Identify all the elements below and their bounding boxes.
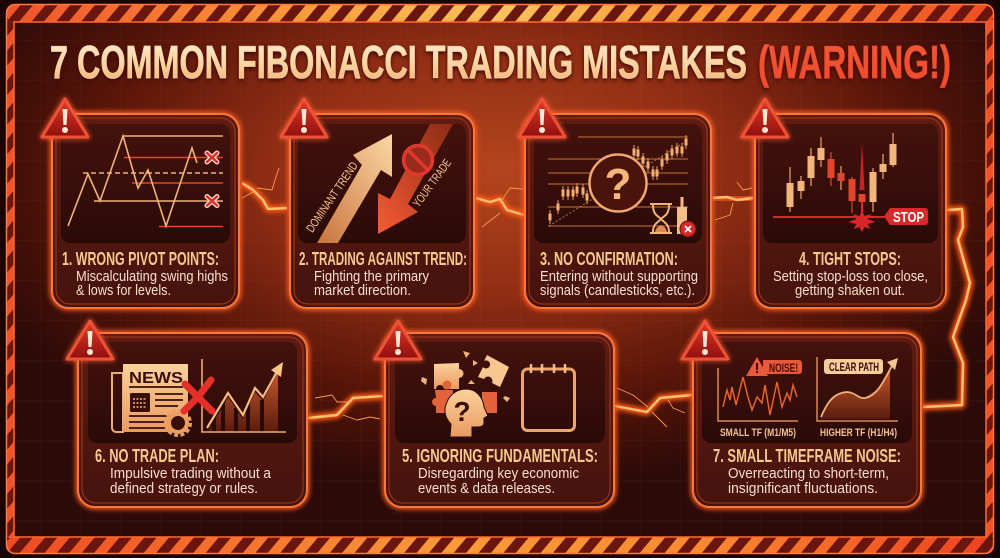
chart: pivot levels [68,136,223,226]
text: mistake 1: Miscalculating swing highs [76,268,228,285]
icon: warning triangle 6 [67,321,113,359]
icon: opposing arrows: DOMINANT TREND [303,159,361,235]
lightning connector: 4 to 7 [923,209,970,407]
icon: opposing arrows [303,124,454,243]
panel: 1 wrong pivot points [52,114,239,308]
text: mistake 6: 6. NO TRADE PLAN: [95,446,219,466]
text: mistake 5: events & data releases. [418,480,555,497]
text: mistake 5: 5. IGNORING FUNDAMENTALS: [402,446,598,466]
text: mistake 1 [62,249,228,299]
icon: warning triangle 7 [682,321,728,359]
panel: 6 no trade plan [78,333,307,507]
text: mistake 2: 2. TRADING AGAINST TREND: [299,249,467,269]
icon: newspaper, gear and chart: NEWS [129,370,183,387]
text: mistake 6: Impulsive trading without a [110,465,272,482]
text: mistake 5 [402,446,598,497]
text: mistake 3: signals (candlesticks, etc.). [540,282,695,299]
icon: warning triangle 3 [519,99,565,137]
icon: warning triangle 1 [42,99,88,137]
text: mistake 7: insignificant fluctuations. [728,480,878,497]
chart: candlesticks with stop: STOP [893,210,924,226]
text: mistake 2: market direction. [314,282,411,299]
panel: 3 no confirmation [525,114,711,308]
lightning connector: 2 to 3 [476,188,524,227]
icon: warning triangle 4 [742,99,788,137]
lightning connector: 7 to 5 [615,388,692,427]
text: mistake 6 [95,446,272,497]
icon: warning triangle 5 [375,321,421,359]
panel: 5 ignoring fundamentals [385,333,614,507]
text: mistake 1: & lows for levels. [76,282,171,299]
text: mistake 4: 4. TIGHT STOPS: [799,249,901,269]
lightning connector: 1 to 2 [242,168,287,209]
icon: puzzle head and calendar [421,351,574,437]
panel: 4 tight stops [755,114,946,308]
text: mistake 7 [713,446,901,497]
chart: noise versus clear path: CLEAR PATH [829,362,879,374]
text: mistake 3: Entering without supporting [540,268,698,285]
chart: noise versus clear path [718,357,898,439]
chart: candles and question mark: ? [605,160,631,209]
chart: noise versus clear path: NOISE! [769,363,798,375]
text: mistake 4: Setting stop-loss too close, [773,268,928,285]
text: mistake 7: 7. SMALL TIMEFRAME NOISE: [713,446,901,466]
text: mistake 2 [299,249,467,299]
lightning connector: 5 to 6 [308,395,383,420]
text: mistake 5: Disregarding key economic [418,465,579,482]
chart: noise versus clear path: HIGHER TF (H1/H4) [820,427,897,439]
chart: candles and question mark [548,135,696,237]
icon: puzzle head and calendar: ? [453,396,471,427]
text: mistake 3 [540,249,698,299]
lightning connector: 3 to 4 [713,182,753,220]
icon: opposing arrows: YOUR TRADE [410,156,454,210]
text: mistake 1: 1. WRONG PIVOT POINTS: [62,249,219,269]
icon: warning triangle 2 [281,99,327,137]
text: mistake 4: getting shaken out. [795,282,905,299]
chart: candlesticks with stop [773,133,928,232]
icon: newspaper, gear and chart [112,359,286,436]
text: mistake 3: 3. NO CONFIRMATION: [540,249,678,269]
panel: 7 small timeframe noise [693,333,921,507]
panel: 2 trading against trend [290,114,474,308]
chart: noise versus clear path: SMALL TF (M1/M5) [720,427,796,439]
text: mistake 4 [773,249,928,299]
text: mistake 2: Fighting the primary [314,268,429,285]
text: mistake 7: Overreacting to short-term, [728,465,889,482]
text: mistake 6: defined strategy or rules. [110,480,258,497]
